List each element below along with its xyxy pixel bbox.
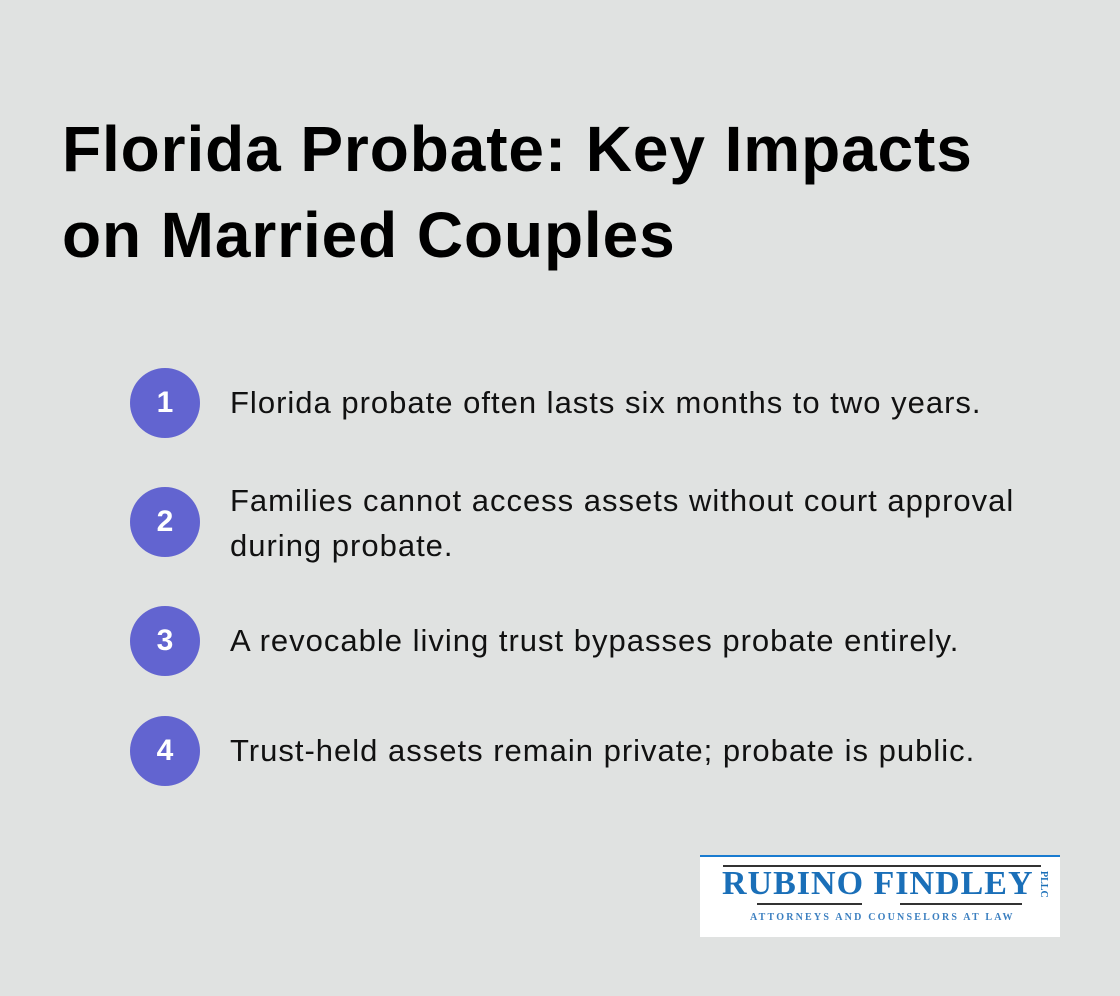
badge 3: 3: [157, 624, 173, 657]
text 2: [230, 483, 1014, 563]
text 1: Florida probate often lasts six months to two years.: [230, 385, 982, 420]
item 1: [130, 368, 982, 438]
text 2: Families cannot access assets without court approval: [230, 483, 1014, 518]
text 3: A revocable living trust bypasses probate entirely.: [230, 623, 959, 658]
item 3: [130, 606, 959, 676]
badge 4: 4: [157, 734, 173, 767]
item 2: [130, 483, 1014, 563]
logo: PLLC: [1038, 871, 1049, 898]
logo: ATTORNEYS AND COUNSELORS AT LAW: [750, 912, 1015, 923]
badge 2: 2: [157, 505, 173, 538]
badge 3: [130, 606, 200, 676]
logo: [700, 855, 1060, 937]
logo: RUBINO FINDLEY: [722, 865, 1034, 902]
title: Florida Probate: Key Impacts: [62, 113, 973, 185]
title: on Married Couples: [62, 199, 676, 271]
item 4: [130, 716, 975, 786]
text 2: during probate.: [230, 528, 454, 563]
badge 1: [130, 368, 200, 438]
title: [62, 113, 973, 271]
badge 2: [130, 487, 200, 557]
text 4: Trust-held assets remain private; probate is public.: [230, 733, 975, 768]
badge 1: 1: [157, 386, 173, 419]
badge 4: [130, 716, 200, 786]
